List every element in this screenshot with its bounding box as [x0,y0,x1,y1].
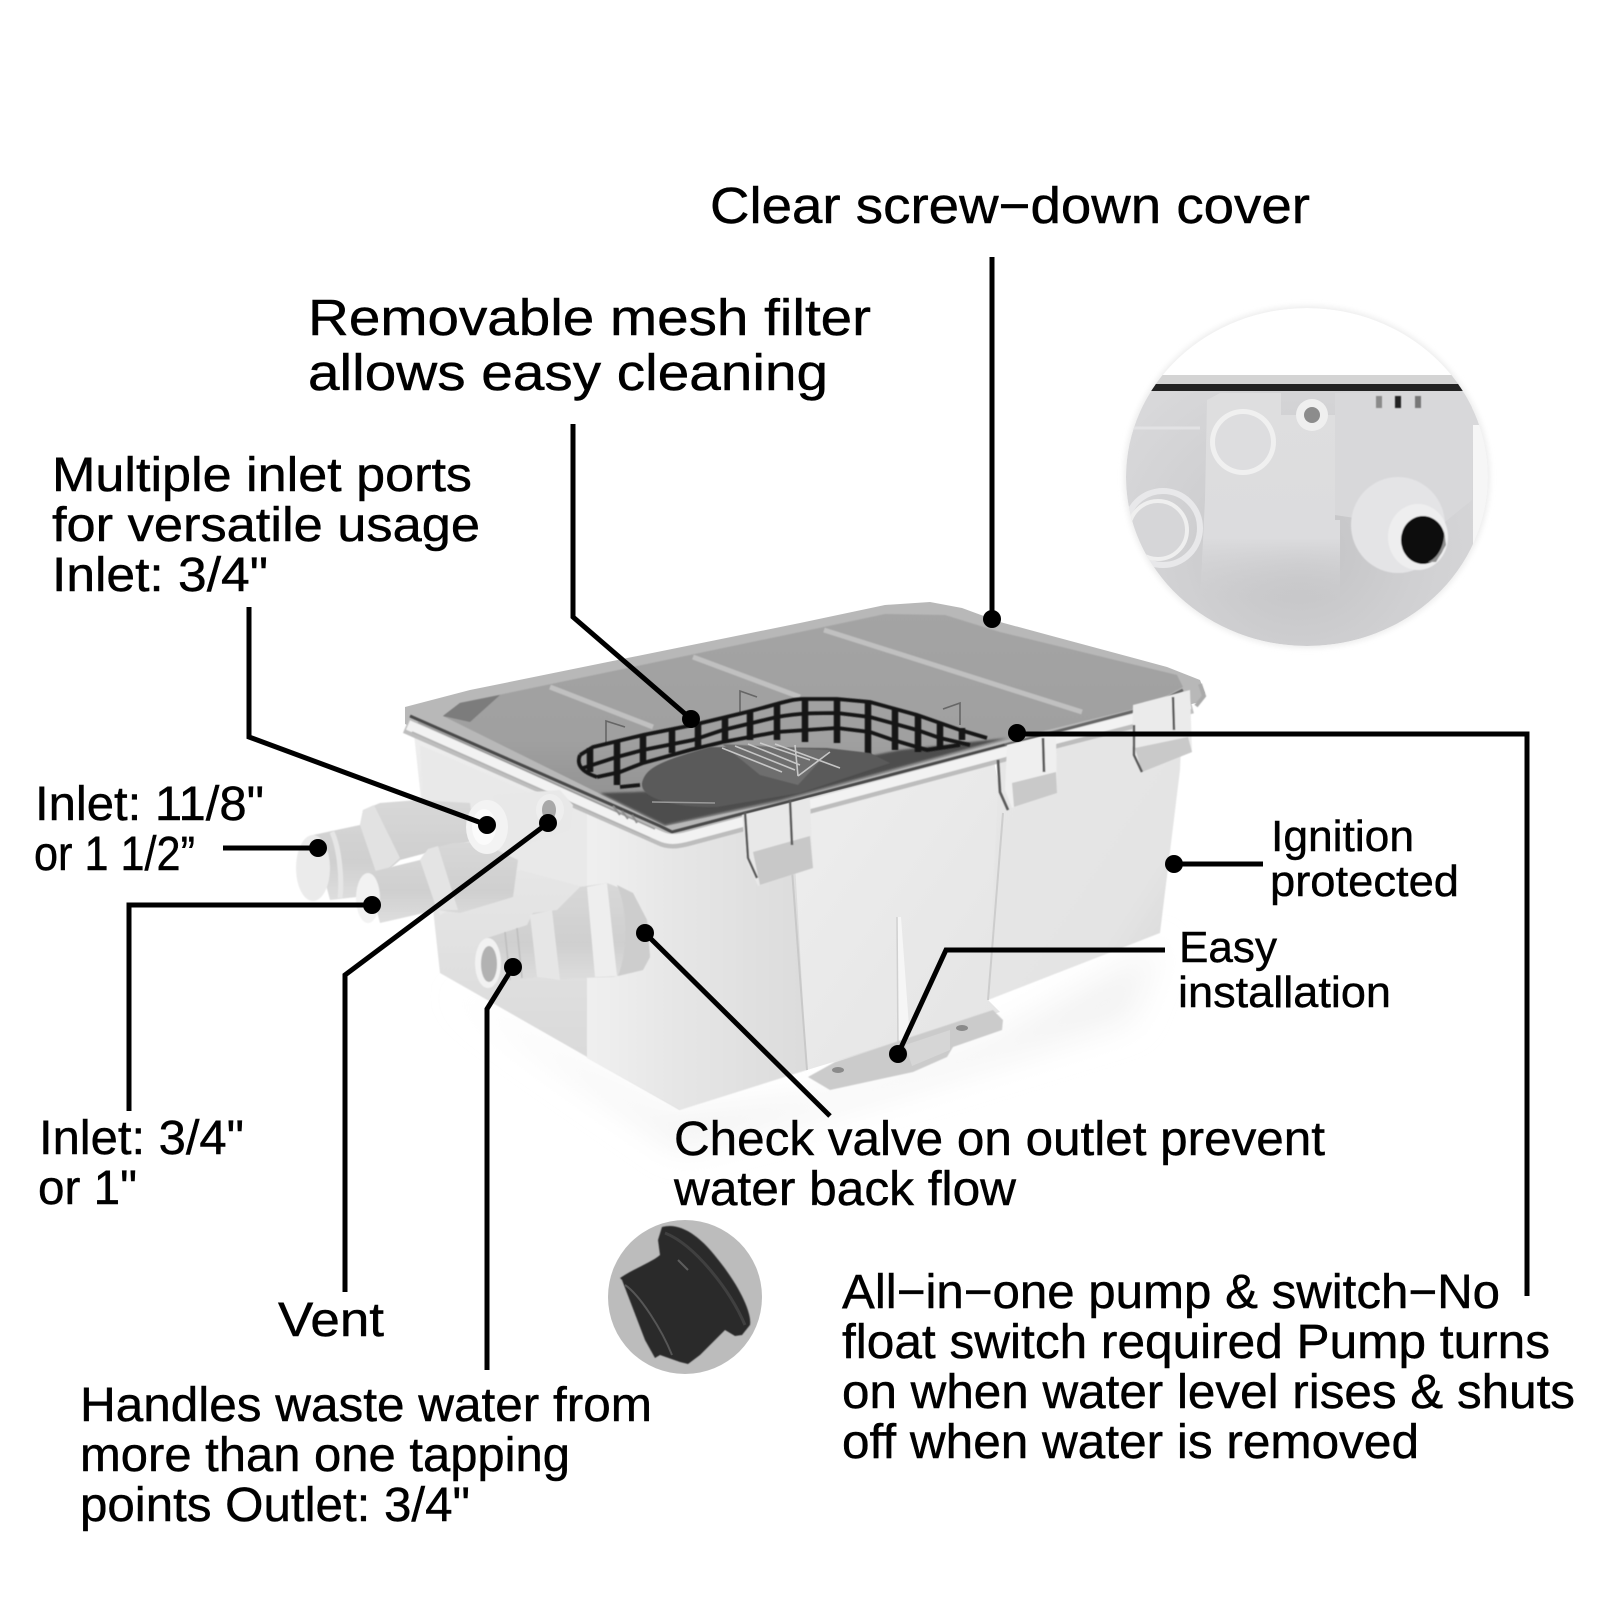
label: on when water level rises & shuts [842,1366,1575,1419]
inlet boss on the left face [420,745,587,915]
large inlet fitting [296,800,475,901]
label: Check valve on outlet prevent [674,1113,1325,1166]
label [1270,812,1459,906]
label [308,289,871,401]
callout: clear cover [710,177,1310,628]
upper inlet collar [493,790,573,852]
dot [636,924,654,942]
mounting foot [808,1010,1003,1090]
label: points Outlet: 3/4" [80,1479,470,1532]
dot [889,1045,907,1063]
lid outer rim [405,602,1205,841]
callout: vent [278,814,557,1347]
floor shadow [450,945,1160,1150]
dot [478,816,496,834]
label: Inlet: 3/4" [39,1112,244,1165]
leader [990,257,994,619]
leader [573,424,691,719]
box front panel [792,757,1005,1070]
callout: all-in-one pump [842,724,1575,1469]
label: Removable mesh filter [308,289,871,346]
dot [363,896,381,914]
inset left fitting [1126,491,1200,565]
callout: outlet waste water [80,958,652,1532]
mesh filter [579,699,987,787]
label: installation [1178,968,1391,1017]
dot [1165,855,1183,873]
callout: multiple inlet ports [52,449,496,834]
filter wire hooks [606,691,960,745]
dot [504,958,522,976]
callout: ignition protected [1165,812,1459,906]
label: for versatile usage [52,499,480,552]
vent port [536,794,564,826]
callout: inlet 3/4 or 1 [38,896,381,1215]
inset terminals [1376,396,1421,408]
box right panel [988,700,1183,1000]
label [673,1113,1325,1216]
lid shadow under the pump [600,738,1007,825]
label: All−in−one pump & switch−No [842,1266,1500,1319]
leader [249,607,487,825]
label: Clear screw−down cover [710,177,1310,234]
leader [345,823,548,1292]
label [52,449,480,602]
label: Multiple inlet ports [52,449,472,502]
label: water back flow [673,1163,1016,1216]
box corner face [587,805,807,1110]
label [1178,923,1391,1017]
label: Easy [1179,923,1277,972]
dot [983,610,1001,628]
label: Inlet: 3/4" [52,549,268,602]
label: Inlet: 11/8" [35,778,264,831]
dot [1008,724,1026,742]
leader [129,905,372,1111]
front rim [406,684,1204,841]
product photo: sump pump box [296,602,1205,1150]
inset small port [1296,399,1328,431]
callout: easy installation [889,923,1391,1063]
plug circle: rubber stopper accessory [608,1220,762,1374]
label [842,1266,1575,1469]
leader [1017,734,1527,1296]
dot [682,710,700,728]
label: Handles waste water from [80,1379,652,1432]
label: or 1 1/2” [34,828,195,881]
label: Ignition [1271,812,1414,861]
label: allows easy cleaning [308,344,828,401]
label [80,1379,652,1532]
outlet fitting [475,883,650,988]
label: or 1" [38,1162,137,1215]
callout: check valve [636,924,1325,1216]
lid interior [443,614,1183,826]
label: float switch required Pump turns [842,1316,1550,1369]
label: protected [1270,857,1459,906]
front panel rib highlight [897,917,910,1045]
label [34,778,264,881]
box left face [413,725,680,1110]
leader [223,846,318,850]
latches [742,690,1192,886]
leader [487,967,513,1370]
label [38,1112,244,1215]
dot [539,814,557,832]
inset circle: side detail of the box [1124,306,1490,648]
label: more than one tapping [80,1429,570,1482]
small inlet fitting [356,842,518,923]
label: Vent [278,1294,384,1347]
callout: inlet 11/8 [34,778,327,881]
dot [309,839,327,857]
leader [645,933,830,1116]
leader [1174,862,1263,866]
inset right fitting [1351,477,1448,573]
inset plug [1210,409,1276,475]
lid ribs [550,630,1082,727]
callout: mesh filter [308,289,871,728]
label: off when water is removed [842,1416,1419,1469]
pump housing [642,743,890,807]
leader [898,950,1165,1054]
